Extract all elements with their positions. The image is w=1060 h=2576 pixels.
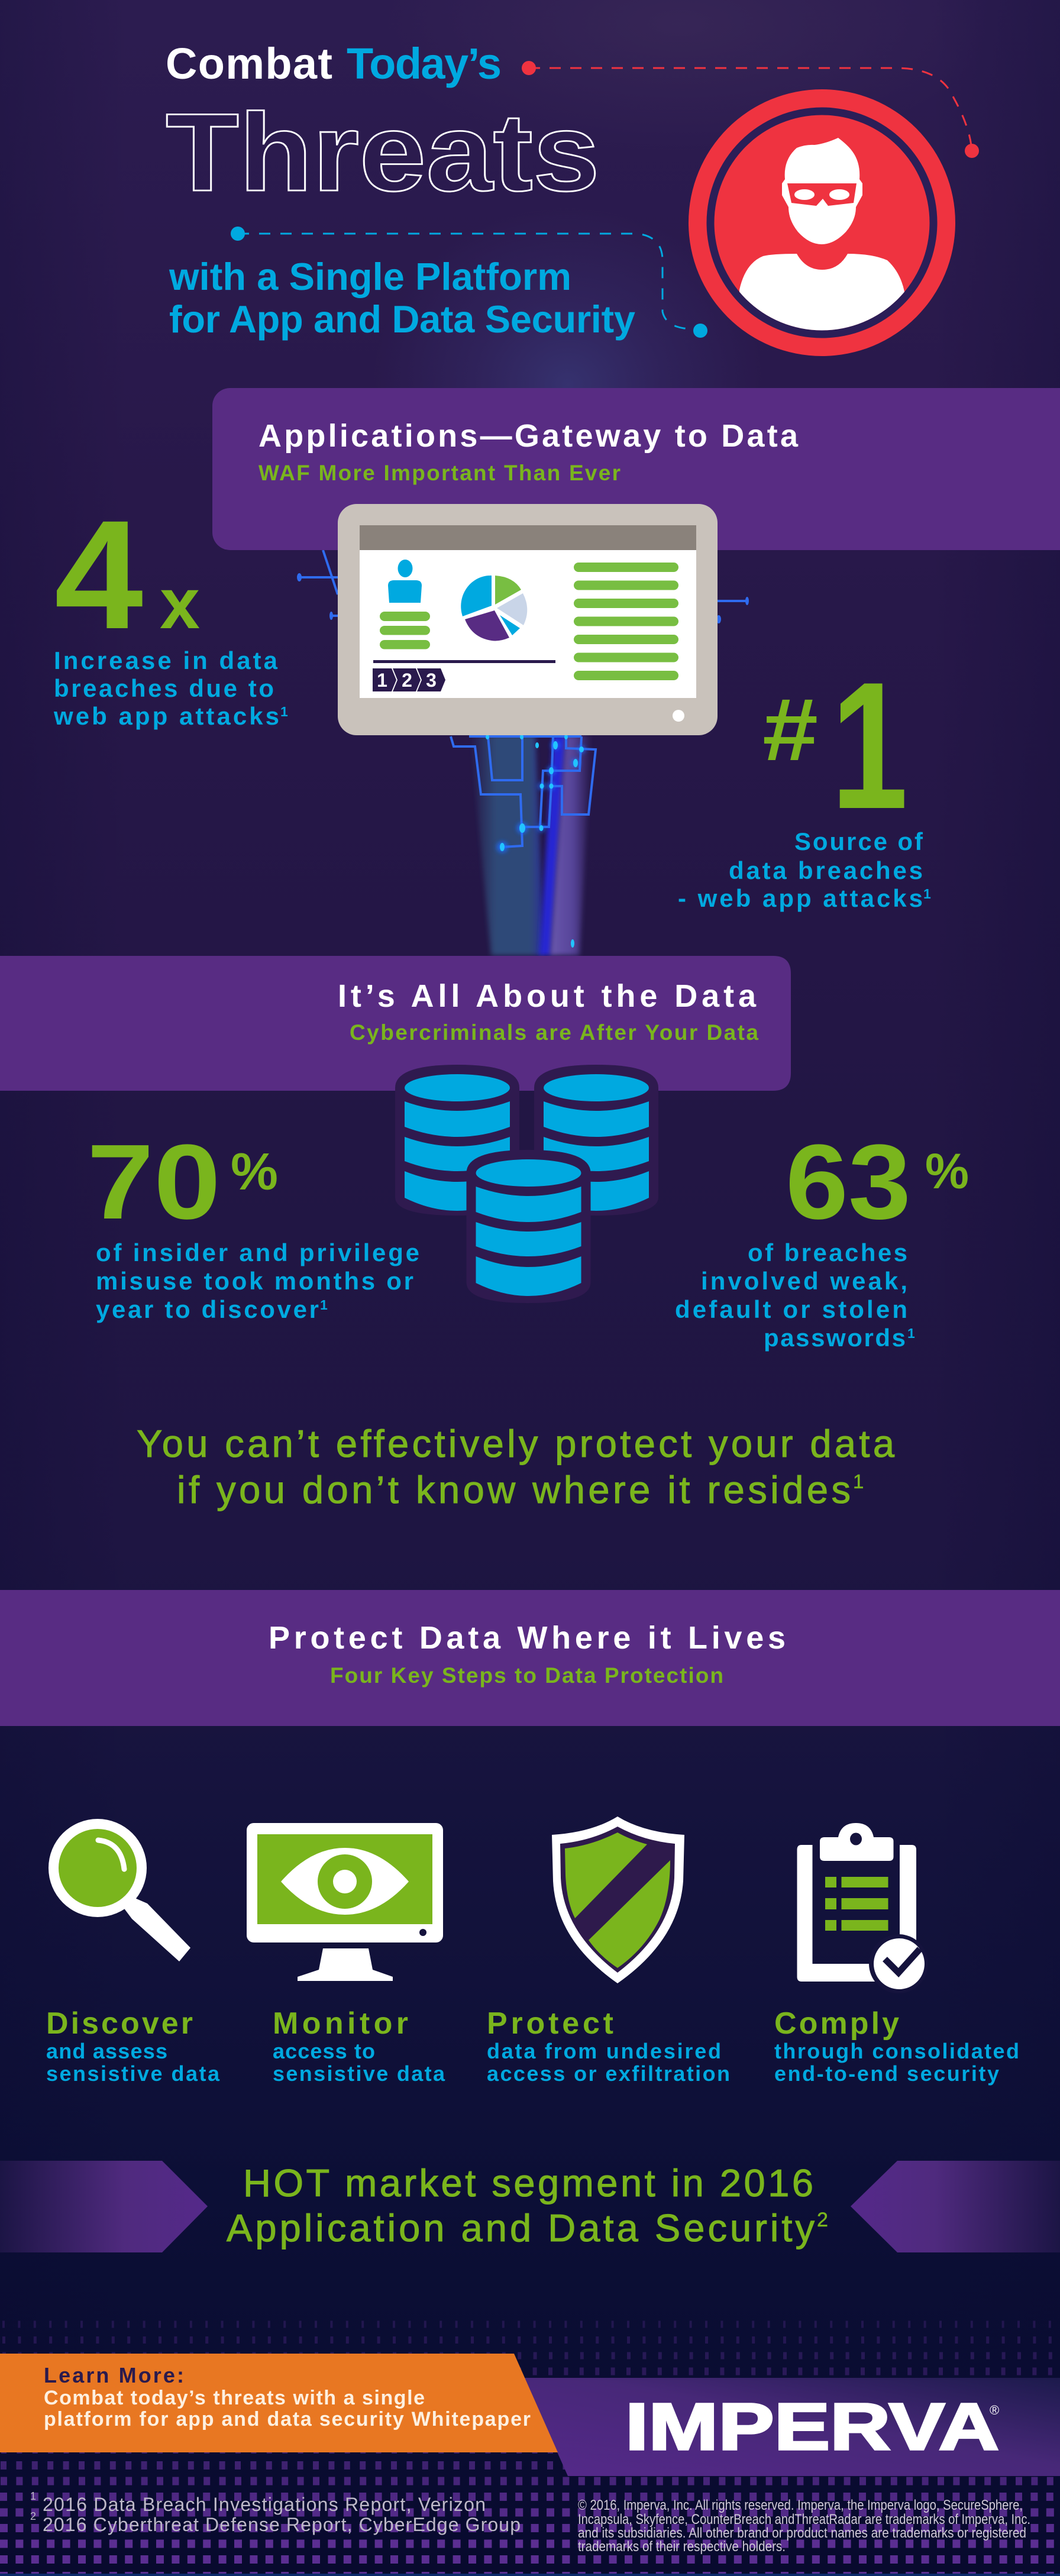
- step: comply: Comply: [774, 2006, 899, 2041]
- subheading: four key steps: Four Key Steps to Data Protection: [330, 1663, 723, 1688]
- text: source of data breaches: - web app attacks: [678, 884, 923, 912]
- panel: all about the data: [0, 956, 791, 1091]
- callout: protect your data: 1: [853, 1470, 864, 1492]
- stat: #1: #: [762, 680, 818, 779]
- icon: magnifier: [49, 1819, 190, 1961]
- callout: protect your data: if you don’t know where it resides: [177, 1468, 851, 1511]
- step: monitor: Monitor: [273, 2006, 408, 2041]
- stat: 4x: 4: [54, 488, 144, 661]
- step chevrons: 2: [402, 670, 412, 691]
- text: weak passwords: default or stolen: [675, 1295, 907, 1323]
- footnotes: 2016 Cyberthreat Defense Report, CyberEdge Group: [43, 2514, 521, 2535]
- text: increase in data breaches: breaches due to: [54, 674, 274, 702]
- stat: 63%: [786, 1123, 969, 1242]
- text: insider misuse: of insider and privilege: [96, 1239, 419, 1266]
- panel: learn more: [0, 2354, 558, 2452]
- callout: hot market segment: 2: [817, 2209, 828, 2231]
- step: comply: [774, 2006, 1019, 2086]
- step: protect: data from undesired: [487, 2039, 721, 2063]
- beam of light with circuit lines: [297, 550, 749, 955]
- icon: database stack: [395, 1065, 658, 1303]
- footnotes: 2: [30, 2510, 36, 2522]
- text: source of data breaches: Source of: [794, 828, 923, 855]
- stat: #1: 1: [831, 644, 908, 846]
- step chevrons: 1: [377, 670, 387, 691]
- stat: 70%: [87, 1123, 278, 1242]
- heading: protect data: Protect Data Where it Lives: [269, 1620, 786, 1656]
- database cylinder left: [395, 1065, 519, 1216]
- callout: hot market segment: Application and Data Security: [227, 2206, 815, 2249]
- text: weak passwords: involved weak,: [701, 1267, 907, 1295]
- heading: Applications: Applications—Gateway to Data: [258, 418, 799, 454]
- text: whitepaper link: Combat today’s threats with a single: [44, 2387, 425, 2409]
- text: source of data breaches: [678, 828, 931, 912]
- step: monitor: sensistive data: [273, 2061, 445, 2086]
- icon: user: [388, 560, 422, 603]
- step: protect: [487, 2006, 730, 2086]
- text: increase in data breaches: [53, 647, 288, 730]
- database cylinder front: [466, 1150, 590, 1303]
- text: weak passwords: passwords: [764, 1324, 906, 1352]
- stat: 63%: 63: [786, 1123, 911, 1242]
- icon: masked hacker: [689, 89, 955, 356]
- step: protect: Protect: [487, 2006, 613, 2041]
- text: whitepaper link: [44, 2387, 531, 2430]
- text: weak passwords: of breaches: [748, 1239, 907, 1266]
- step: monitor: access to: [273, 2039, 375, 2063]
- step: discover: and assess: [46, 2039, 167, 2063]
- text: increase in data breaches: Increase in data: [54, 647, 278, 674]
- blue dashed connector: [231, 227, 707, 338]
- title: Threats outline: Threats: [166, 91, 600, 214]
- subheading: WAF: WAF More Important Than Ever: [258, 461, 621, 485]
- step: monitor: [273, 2006, 445, 2086]
- step: protect: access or exfiltration: [487, 2061, 730, 2086]
- stat: #1: [762, 644, 908, 846]
- green list right: [574, 563, 678, 680]
- red dashed connector: [522, 61, 979, 158]
- data glow behind header: [373, 207, 763, 562]
- arrow: right ribbon: [851, 2161, 1060, 2252]
- stat: 70%: %: [231, 1142, 278, 1201]
- text: source of data breaches: data breaches: [729, 856, 923, 884]
- text: increase in data breaches: web app attacks: [53, 702, 279, 730]
- text: insider misuse: year to discover: [96, 1295, 319, 1323]
- subtitle: with a Single Platform: [169, 255, 635, 341]
- stat: 70%: 70: [87, 1123, 221, 1242]
- text: insider misuse: [96, 1239, 419, 1323]
- pie chart: [461, 576, 527, 641]
- footnotes: 1: [30, 2490, 36, 2502]
- icon: monitor eye: [247, 1823, 443, 1981]
- stat: 4x: [54, 488, 200, 661]
- text: insider misuse: misuse took months or: [96, 1267, 413, 1295]
- step: comply: end-to-end security: [774, 2061, 999, 2086]
- dot pattern background: [0, 2325, 1060, 2574]
- callout: protect your data: You can’t effectively protect your data: [137, 1422, 895, 1465]
- copyright text: trademarks of their respective holders.: [578, 2539, 786, 2555]
- title: Combat Today's: [166, 39, 502, 88]
- text: weak passwords: 1: [907, 1326, 915, 1341]
- logo: Imperva: ®: [990, 2403, 999, 2417]
- title: Combat Today's: Combat: [166, 39, 332, 88]
- callout: protect your data: [137, 1422, 895, 1511]
- heading: learn more: Learn More:: [44, 2363, 184, 2387]
- footnotes: [30, 2490, 521, 2535]
- title: Combat Today's: Today’s: [347, 39, 502, 88]
- database cylinder right: [534, 1065, 658, 1216]
- subheading: cybercriminals: Cybercriminals are After Your Data: [350, 1020, 758, 1045]
- stat: 4x: x: [160, 563, 200, 644]
- panel: applications gateway: [212, 388, 1060, 550]
- green list left: [380, 612, 430, 649]
- step chevrons: 3: [426, 670, 437, 691]
- monitor with dashboard: [338, 504, 718, 735]
- subtitle: with a Single Platform: with a Single Platform: [169, 255, 571, 298]
- step chevrons: [373, 668, 445, 691]
- text: increase in data breaches: 1: [280, 704, 288, 719]
- text: weak passwords: [675, 1239, 915, 1352]
- stat: 63%: %: [925, 1143, 969, 1199]
- icon: shield: [552, 1817, 684, 1983]
- copyright text: [578, 2497, 1030, 2555]
- panel: protect data where it lives: [0, 1590, 1060, 1726]
- step: discover: Discover: [46, 2006, 193, 2041]
- step: discover: [46, 2006, 220, 2086]
- text: whitepaper link: platform for app and data security Whitepaper: [44, 2408, 531, 2430]
- footnotes: 2016 Data Breach Investigations Report, Verizon: [43, 2494, 486, 2515]
- text: source of data breaches: 1: [923, 886, 931, 901]
- logo: Imperva: IMPERVA: [625, 2390, 999, 2464]
- callout: hot market segment: [227, 2161, 828, 2249]
- icon: clipboard: [797, 1823, 928, 1993]
- subtitle: with a Single Platform: for App and Data Security: [169, 298, 635, 341]
- arrow: left ribbon: [0, 2161, 208, 2252]
- text: insider misuse: 1: [320, 1297, 328, 1313]
- callout: hot market segment: HOT market segment in 2016: [243, 2161, 813, 2205]
- panel: logo band: [524, 2378, 1060, 2476]
- heading: all about the data: It’s All About the Data: [338, 978, 757, 1014]
- step: discover: sensistive data: [46, 2061, 220, 2086]
- step: comply: through consolidated: [774, 2039, 1019, 2063]
